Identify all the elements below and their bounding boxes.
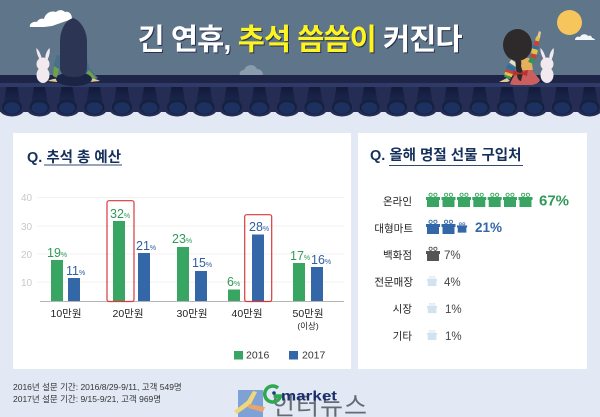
row: 전문매장 bbox=[374, 276, 461, 289]
roof bbox=[0, 75, 600, 116]
row: 기타: 1% bbox=[445, 331, 462, 343]
bar value labels: 17% bbox=[290, 249, 310, 263]
jacket bbox=[520, 58, 533, 70]
bar value labels: 23% bbox=[172, 232, 192, 246]
row: 전문매장: 4% bbox=[444, 277, 461, 289]
survey note: 2017년 설문 기간: 9/15-9/21, 고객 969명 bbox=[13, 394, 161, 404]
bar value labels bbox=[47, 207, 331, 289]
bar value labels: 21% bbox=[136, 239, 156, 253]
sky bbox=[0, 0, 600, 76]
logo: Gmarket: market bbox=[281, 388, 338, 404]
bar value labels: 11% bbox=[66, 264, 85, 278]
title: 긴 연휴, 추석 씀씀이 커진다 bbox=[138, 24, 462, 56]
bar value labels: 15% bbox=[192, 256, 212, 270]
row: 기타 bbox=[393, 330, 462, 343]
row: 대형마트: 대형마트 bbox=[374, 223, 413, 235]
row: 대형마트 bbox=[374, 220, 502, 235]
x axis labels: 50만원 bbox=[292, 308, 324, 320]
left sleeve stripes bbox=[507, 62, 515, 78]
row: 시장: 1% bbox=[445, 304, 462, 316]
highlight: 40만원 bbox=[245, 215, 272, 302]
icon: cloud by moon bbox=[575, 34, 595, 40]
row: 전문매장: 전문매장 bbox=[374, 276, 413, 288]
x axis labels: (이상) bbox=[297, 321, 319, 331]
icon: moon bbox=[557, 10, 582, 35]
skirt bbox=[510, 70, 540, 85]
bar value labels: 6% bbox=[227, 275, 240, 289]
logo: Gmarket bbox=[265, 386, 338, 404]
row: 시장 bbox=[393, 303, 462, 316]
bar chart bbox=[40, 221, 344, 302]
illustration: girl in hanbok from behind bbox=[499, 29, 541, 85]
panel: budget chart bbox=[13, 133, 351, 369]
legend: 2017 bbox=[302, 350, 326, 362]
survey note bbox=[13, 382, 182, 404]
icon: faint cloud bbox=[240, 65, 263, 75]
bar value labels: 32% bbox=[110, 207, 130, 221]
row: 기타: 기타 bbox=[393, 330, 412, 342]
bar value labels: 19% bbox=[47, 246, 67, 260]
highlight: 20만원 bbox=[107, 201, 134, 302]
row: 온라인: 67% bbox=[539, 192, 569, 210]
illustration: boy in hat from behind bbox=[48, 18, 100, 86]
icon: right rabbit bbox=[540, 48, 554, 83]
row: 백화점: 7% bbox=[444, 250, 461, 262]
heading: channels: Q. 올해 명절 선물 구입처 bbox=[370, 147, 521, 164]
icon: left rabbit bbox=[36, 48, 50, 83]
y axis and grid bbox=[21, 193, 344, 289]
row: 온라인 bbox=[383, 192, 569, 210]
legend bbox=[234, 350, 326, 362]
row: 백화점: 백화점 bbox=[383, 250, 412, 262]
watermark: 인터뉴스 bbox=[234, 390, 367, 417]
header banner bbox=[0, 0, 600, 116]
row: 온라인: 온라인 bbox=[383, 196, 412, 208]
bar value labels: 28% bbox=[249, 220, 269, 234]
heading: budget: Q. 추석 총 예산 bbox=[27, 149, 121, 166]
y axis and grid: 40 bbox=[21, 193, 33, 204]
icon: cloud upper left bbox=[30, 10, 72, 27]
y axis and grid: 10 bbox=[21, 278, 33, 289]
y axis and grid: 30 bbox=[21, 222, 33, 233]
x axis labels: 40만원 bbox=[232, 308, 262, 320]
survey note: 2016년 설문 기간: 2016/8/29-9/11, 고객 549명 bbox=[13, 382, 182, 392]
x axis labels bbox=[50, 308, 324, 331]
x axis labels: 30만원 bbox=[176, 308, 208, 320]
bar value labels: 16% bbox=[311, 253, 331, 267]
row: 시장: 시장 bbox=[393, 304, 412, 316]
panel: gift purchase channels bbox=[358, 133, 587, 369]
y axis and grid: 20 bbox=[21, 250, 33, 261]
legend: 2016 bbox=[246, 350, 270, 362]
row: 대형마트: 21% bbox=[475, 220, 502, 235]
x axis labels: 20만원 bbox=[112, 308, 144, 320]
right sleeve stripes bbox=[531, 37, 538, 63]
row: 백화점 bbox=[383, 247, 461, 262]
x axis labels: 10만원 bbox=[50, 308, 82, 320]
